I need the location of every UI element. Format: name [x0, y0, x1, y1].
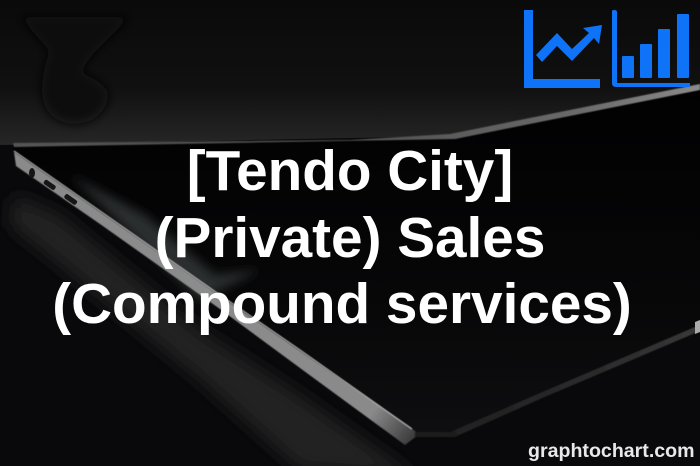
faint logo — [20, 17, 130, 124]
lower laptop edge — [415, 325, 700, 437]
title: (Private) Sales — [155, 207, 545, 270]
title — [52, 140, 632, 336]
hinge line — [13, 84, 700, 147]
floor glow under laptop edge — [10, 195, 420, 466]
title: (Compound services) — [52, 273, 632, 336]
watermark: graphtochart.com — [528, 440, 695, 462]
laptop edge — [14, 152, 418, 445]
lid surface above hinge — [0, 0, 700, 145]
title: [Tendo City] — [187, 140, 513, 203]
reflection above edge — [70, 175, 260, 300]
laptop screen black — [13, 88, 700, 434]
ports — [29, 168, 78, 205]
